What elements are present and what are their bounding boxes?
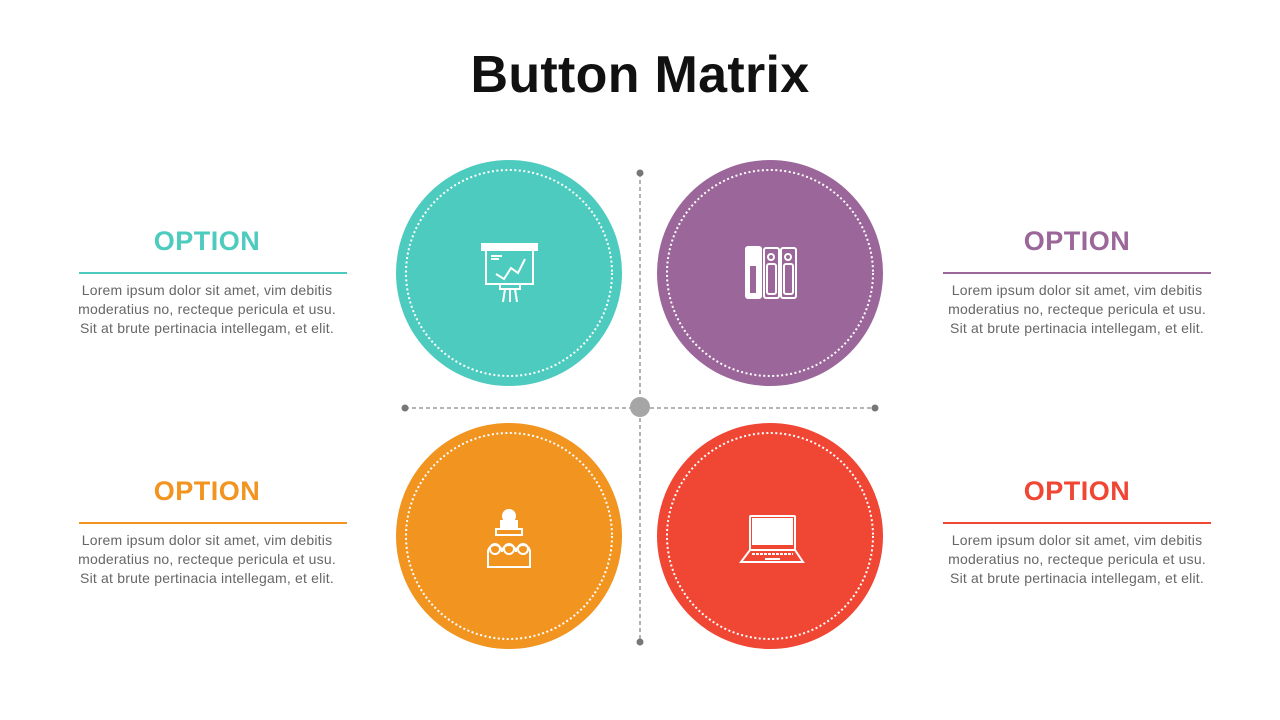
option: bottom-right xyxy=(943,476,1211,586)
icon: audience xyxy=(488,510,530,567)
circle: red xyxy=(657,423,883,649)
option: bottom-right: Sit at brute pertinacia intellegam, et elit. xyxy=(950,570,1204,586)
axis lines xyxy=(402,170,878,646)
icon: presentation board xyxy=(482,244,537,302)
circle: purple xyxy=(657,160,883,386)
option: top-left: moderatius no, recteque pericula et usu. xyxy=(78,301,336,317)
option: bottom-left: OPTION xyxy=(154,476,260,506)
option: top-right: Lorem ipsum dolor sit amet, vim debitis xyxy=(952,282,1202,298)
title: Button Matrix xyxy=(470,46,809,104)
option: top-left: Sit at brute pertinacia intellegam, et elit. xyxy=(80,320,334,336)
circle: teal xyxy=(396,160,622,386)
option: top-left: OPTION xyxy=(154,226,260,256)
option: bottom-left: moderatius no, recteque pericula et usu. xyxy=(78,551,336,567)
option: top-right: moderatius no, recteque pericula et usu. xyxy=(948,301,1206,317)
option: bottom-right: OPTION xyxy=(1024,476,1130,506)
option: top-right: OPTION xyxy=(1024,226,1130,256)
icon: laptop xyxy=(741,516,803,562)
icon: binders xyxy=(746,247,796,298)
option: bottom-left: Lorem ipsum dolor sit amet, vim debitis xyxy=(82,532,332,548)
option: bottom-right: moderatius no, recteque pericula et usu. xyxy=(948,551,1206,567)
option: top-left: Lorem ipsum dolor sit amet, vim debitis xyxy=(82,282,332,298)
option: top-left xyxy=(78,226,347,336)
option: top-right xyxy=(943,226,1211,336)
option: bottom-left: Sit at brute pertinacia intellegam, et elit. xyxy=(80,570,334,586)
option: bottom-right: Lorem ipsum dolor sit amet, vim debitis xyxy=(952,532,1202,548)
option: top-right: Sit at brute pertinacia intellegam, et elit. xyxy=(950,320,1204,336)
center dot xyxy=(630,397,650,417)
option: bottom-left xyxy=(78,476,347,586)
circle: orange xyxy=(396,423,622,649)
